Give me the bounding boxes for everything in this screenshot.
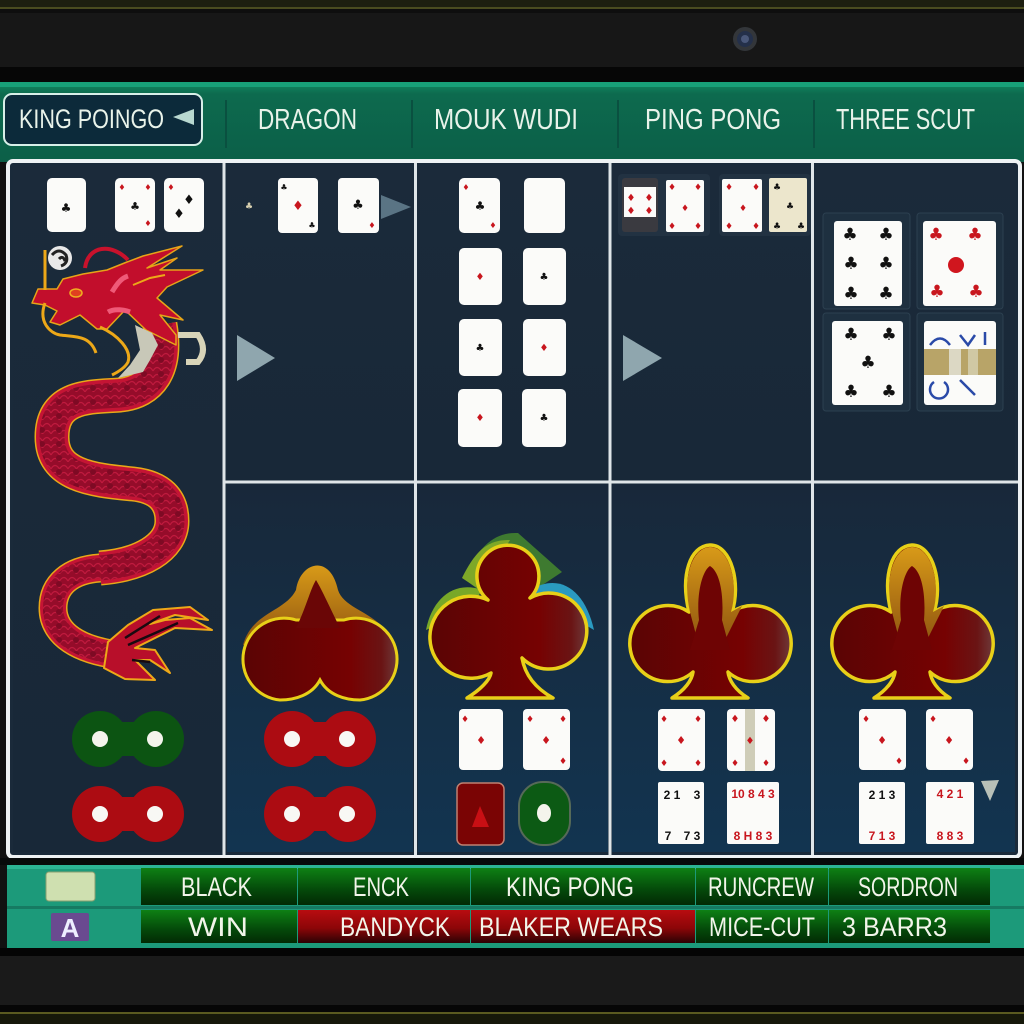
cards: lower: ♦ xyxy=(559,715,567,725)
coins: green pair xyxy=(72,711,184,767)
row 1 cells: ENCK xyxy=(353,872,409,902)
cards grid: ♦ xyxy=(489,221,497,230)
card trays: ♦ xyxy=(668,183,676,193)
panel: dragon column xyxy=(13,166,222,852)
panel: upper column 4 xyxy=(612,166,811,480)
cards: top row left: ♣ xyxy=(61,201,71,215)
cards: lower: ♦ xyxy=(694,715,702,725)
card trays: ♣ xyxy=(797,222,805,232)
arrow: large xyxy=(623,335,662,381)
cards: lower: ♦ xyxy=(762,714,770,725)
card: six of clubs: ♣ xyxy=(842,225,858,245)
dragon head xyxy=(32,246,203,345)
token: green tile xyxy=(519,782,570,845)
cards grid: ♦ xyxy=(476,413,484,424)
card trays: ♦ xyxy=(627,193,635,204)
row 2 cells: MICE-CUT xyxy=(709,912,815,942)
cards: lower: ♦ xyxy=(762,759,770,769)
header tab bar xyxy=(0,82,1024,162)
cards: lower: ♦ xyxy=(461,715,469,725)
card: striped blue xyxy=(924,321,996,405)
cards: lower: 7 xyxy=(665,829,672,843)
cards grid: ♣ xyxy=(475,199,485,213)
row 1 cells: RUNCREW xyxy=(708,872,814,902)
card: red five: ♣ xyxy=(968,282,984,302)
card: five of clubs xyxy=(832,321,903,405)
active tab: king pong: KING POINGO xyxy=(19,104,164,134)
card: five of clubs: ♣ xyxy=(860,353,876,373)
icon: beige tile xyxy=(46,872,95,901)
card: red five: ♣ xyxy=(967,225,983,245)
card trays: ♦ xyxy=(739,204,747,214)
icon: camera xyxy=(733,27,757,51)
card: six of clubs: ♣ xyxy=(878,284,894,304)
icon: club xyxy=(832,545,993,698)
cards: lower: 10 8 4 3 xyxy=(731,787,775,801)
cards: top row left: ♦ xyxy=(173,207,185,222)
card: six of clubs: ♣ xyxy=(843,284,859,304)
cards: lower: ♦ xyxy=(862,715,870,725)
cards: lower: ♦ xyxy=(526,715,534,725)
cards: ♣ xyxy=(352,198,364,213)
row 2 cells: BANDYCK xyxy=(340,912,450,942)
game board frame xyxy=(8,161,1020,857)
dragon whiskers xyxy=(43,250,129,375)
tab: mouk wudi: MOUK WUDI xyxy=(434,104,578,136)
cards grid: ♣ xyxy=(540,272,548,283)
card trays: ♦ xyxy=(627,206,635,217)
cards grid: ♦ xyxy=(476,272,484,283)
cards: top row left: ♦ xyxy=(183,193,195,208)
card: red five: ♣ xyxy=(929,282,945,302)
cards: top row left: ♦ xyxy=(118,183,126,192)
cards: lower: 7 1 3 xyxy=(869,829,896,843)
row 1 cells: BLACK xyxy=(181,872,252,902)
row 2 cells: BLAKER WEARS xyxy=(479,912,663,942)
card trays: ♦ xyxy=(668,222,676,232)
cards: ♦ xyxy=(292,199,304,214)
card: six of clubs: ♣ xyxy=(878,254,894,274)
row 2 cells: 3 BARR3 xyxy=(842,912,947,942)
card: red five xyxy=(923,221,996,306)
cards: lower: 2 1 3 xyxy=(869,788,896,802)
cards: lower: ♦ xyxy=(731,759,739,769)
card: six of clubs: ♣ xyxy=(878,225,894,245)
cards: lower: ♦ xyxy=(929,715,937,725)
card trays: ♣ xyxy=(773,183,781,193)
row 2 cells: WIN xyxy=(188,912,248,942)
card: five of clubs: ♣ xyxy=(843,382,859,402)
card trays: ♣ xyxy=(773,222,781,232)
card: six of clubs: ♣ xyxy=(843,254,859,274)
card trays: ♦ xyxy=(694,183,702,193)
cards grid: ♦ xyxy=(462,183,470,192)
card trays: ♦ xyxy=(694,222,702,232)
cards grid: ♣ xyxy=(476,343,484,354)
cards: ♣ xyxy=(245,202,253,212)
card: five of clubs: ♣ xyxy=(881,382,897,402)
card: five of clubs: ♣ xyxy=(881,325,897,345)
dragon body xyxy=(52,325,172,655)
status table xyxy=(0,858,1024,948)
row 2 cells xyxy=(141,910,990,943)
panel: upper column 5 xyxy=(815,166,1015,480)
cards: lower: 2 1 xyxy=(664,788,681,802)
card trays: ♦ xyxy=(681,204,689,214)
cards: lower: ♦ xyxy=(676,734,686,747)
cards xyxy=(245,178,379,233)
panel: lower column 4 xyxy=(612,484,810,852)
arrow: small xyxy=(381,195,411,219)
coins: red pair xyxy=(72,786,184,842)
bottom bezel xyxy=(0,948,1024,1024)
token: red tile xyxy=(457,783,504,845)
cards: lower: ♦ xyxy=(731,714,739,725)
cards grid: ♣ xyxy=(540,413,548,424)
coins: red pair lower xyxy=(264,786,376,842)
cards: ♣ xyxy=(280,183,288,192)
cards: top row left: ♦ xyxy=(144,219,152,228)
dragon pearl xyxy=(48,246,72,270)
tab: three scut: THREE SCUT xyxy=(836,104,975,136)
cards: lower: ♦ xyxy=(944,734,954,747)
cards: lower xyxy=(658,709,779,844)
tab: ping pong: PING PONG xyxy=(645,104,781,136)
panel: upper column 3 xyxy=(418,166,608,480)
card trays: ♦ xyxy=(725,183,733,193)
card trays: ♣ xyxy=(786,202,794,212)
tab: dragon: DRAGON xyxy=(258,104,357,136)
panel: lower column 2 xyxy=(227,484,413,852)
cards grid xyxy=(458,178,566,447)
cards: lower xyxy=(859,709,974,844)
dragon silver claw xyxy=(118,325,158,378)
illustration: red dragon xyxy=(32,246,212,680)
card trays: ♦ xyxy=(645,206,653,217)
cards: lower: ♦ xyxy=(476,734,486,747)
cards: lower xyxy=(459,709,570,770)
cards: lower: ♦ xyxy=(962,757,970,767)
card: five of clubs: ♣ xyxy=(843,325,859,345)
card trays: ♦ xyxy=(752,183,760,193)
cards grid: ♦ xyxy=(540,343,548,354)
coins: red pair upper xyxy=(264,711,376,767)
row 1 cells: SORDRON xyxy=(858,872,958,902)
card trays xyxy=(618,174,811,236)
cards: top row left: ♦ xyxy=(144,183,152,192)
top bezel xyxy=(0,0,1024,82)
cards: lower: ♦ xyxy=(895,757,903,767)
cards: lower: 8 H 8 3 xyxy=(734,829,773,843)
card: six of clubs xyxy=(834,221,902,306)
icon: letter A tile: A xyxy=(61,913,80,943)
cards: top row left: ♣ xyxy=(130,200,140,213)
cards: lower: 8 8 3 xyxy=(937,829,964,843)
cards: top row left xyxy=(47,178,204,232)
cards: ♣ xyxy=(308,221,316,230)
cards: lower: 7 3 xyxy=(684,829,701,843)
card: red five: ♣ xyxy=(928,225,944,245)
cards: lower: ♦ xyxy=(559,757,567,767)
icon: club without stem xyxy=(243,566,397,700)
row 1 cells: KING PONG xyxy=(506,872,634,902)
row 1 cells xyxy=(141,868,990,905)
cards: top row left: ♦ xyxy=(167,183,175,192)
card trays xyxy=(823,213,1003,411)
cards: lower: ♦ xyxy=(877,734,887,747)
icon: club with colored swoosh xyxy=(426,533,594,698)
card trays: ♦ xyxy=(752,222,760,232)
cards: lower: ♦ xyxy=(660,715,668,725)
cards: lower: 4 2 1 xyxy=(937,787,964,801)
card trays: ♦ xyxy=(645,193,653,204)
cards: lower: ♦ xyxy=(660,759,668,769)
arrow: small marker xyxy=(981,780,999,801)
card trays: ♦ xyxy=(725,222,733,232)
panel: lower column 3 xyxy=(418,484,608,852)
cards: lower: ♦ xyxy=(541,734,551,747)
cards: lower: ♦ xyxy=(694,759,702,769)
active tab: king pong xyxy=(4,94,202,145)
panel: upper column 2 xyxy=(227,166,413,480)
icon: club xyxy=(630,545,791,698)
arrow: large xyxy=(237,335,275,381)
icon: letter A tile xyxy=(51,913,89,943)
cards: lower: ♦ xyxy=(746,736,754,747)
dragon tail fins xyxy=(104,607,212,680)
panel: lower column 5 xyxy=(815,484,1015,852)
cards: ♦ xyxy=(368,221,376,230)
cards: lower: 3 xyxy=(694,788,701,802)
